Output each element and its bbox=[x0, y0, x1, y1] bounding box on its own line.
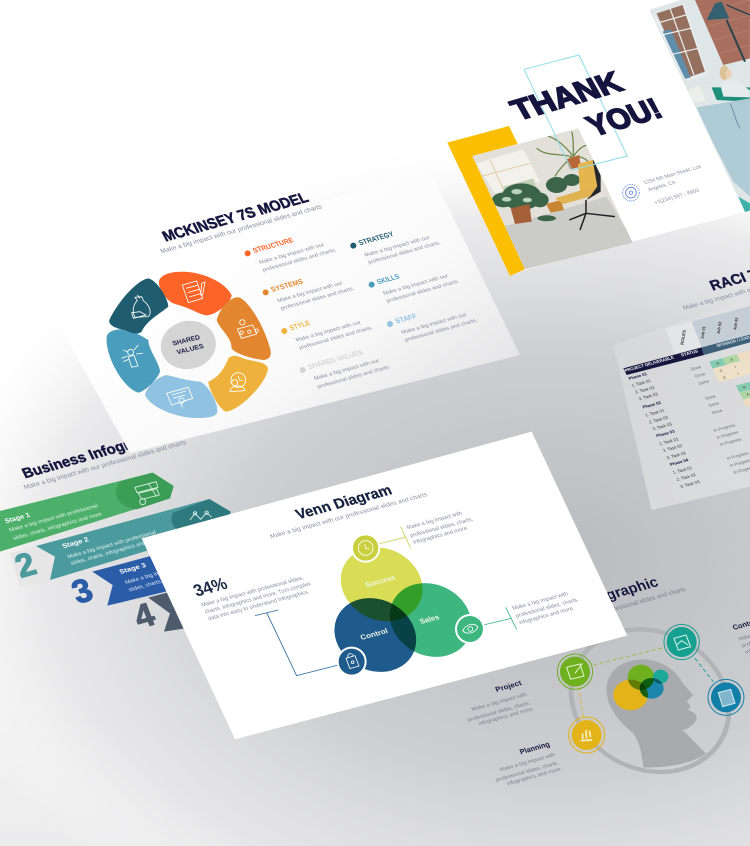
McKinsey subtitle: Make a big impact with our professional slides and charts bbox=[159, 204, 324, 255]
Venn circles bbox=[321, 539, 484, 681]
item: strategy bbox=[350, 229, 442, 266]
icon: idea person bbox=[122, 345, 143, 367]
circle labels bbox=[359, 573, 441, 642]
brain bubbles bbox=[613, 665, 668, 710]
RACI table: ROLES bbox=[679, 330, 687, 345]
stage 2 arrow: slides, charts, infographics and more bbox=[70, 537, 161, 567]
RACI table: R bbox=[715, 361, 720, 366]
item: style bbox=[281, 318, 374, 351]
item: structure bbox=[245, 236, 338, 273]
stage 3 number: 3 bbox=[67, 572, 98, 611]
item: structure: STRUCTURE bbox=[251, 236, 295, 255]
stage 4 arrow bbox=[148, 590, 197, 632]
head title: Infographic bbox=[578, 575, 661, 611]
item: strategy: Make a big impact with our bbox=[364, 235, 431, 258]
stage 3 arrow: slides, charts, infographics and more bbox=[128, 563, 219, 593]
icon: certificate screen bbox=[167, 387, 193, 407]
icon: money bag bbox=[132, 295, 150, 318]
RACI table: Done bbox=[708, 400, 720, 408]
photo: office with plants and chair bbox=[470, 127, 637, 273]
RACI table: Phase 01 bbox=[628, 371, 648, 381]
RACI table: In Progress bbox=[716, 430, 739, 440]
stage 1 arrow: Stage 1 bbox=[4, 512, 32, 525]
label: project: infographics and more. bbox=[478, 706, 535, 727]
RACI table: 2. Task 02 bbox=[634, 385, 656, 395]
panel: thank you slide bbox=[447, 0, 750, 276]
RACI table: 3. Task 03 bbox=[652, 421, 673, 431]
circle labels: Success bbox=[364, 573, 397, 589]
item: style: Make a big impact with our bbox=[295, 320, 362, 343]
RACI table: Done bbox=[711, 408, 724, 415]
RACI table: Phase 02 bbox=[642, 400, 662, 410]
item: systems: professional slides and charts. bbox=[280, 286, 356, 312]
RACI table: STATUS bbox=[680, 348, 699, 358]
Venn subtitle: Make a big impact with our professional slides and charts bbox=[269, 492, 429, 540]
stat: 34 percent: 34% bbox=[190, 573, 230, 600]
head silhouette bbox=[606, 659, 706, 767]
contact text: 1234 5th Main Street, Los bbox=[643, 164, 703, 186]
item: systems: SYSTEMS bbox=[269, 277, 305, 294]
item: style: professional slides and charts. bbox=[298, 325, 374, 351]
RACI table: 3. Task 03 bbox=[679, 479, 701, 489]
text: sales note: professional slides, charts, bbox=[515, 597, 580, 619]
panel: head infographic slide bbox=[467, 575, 750, 789]
thank you title: THANK bbox=[505, 66, 628, 127]
RACI table: In Progress bbox=[726, 451, 749, 461]
text: sales note bbox=[512, 591, 580, 626]
stage 4 number: 4 bbox=[129, 596, 160, 636]
icon: eye badge bbox=[455, 614, 485, 644]
RACI table: 1. Task 01 bbox=[672, 465, 694, 475]
text: success note: infographics and more. bbox=[412, 525, 470, 546]
head subtitle: Make a big impact with our professional slides and charts bbox=[530, 586, 687, 636]
RACI table: 1. Task 01 bbox=[631, 378, 652, 388]
RACI table: Done bbox=[690, 364, 703, 372]
icon: clock and person bbox=[230, 373, 246, 392]
stat description: data into easy to understand infographics. bbox=[207, 589, 311, 622]
text: success note bbox=[406, 511, 475, 546]
panel: McKinsey 7S slide bbox=[37, 170, 520, 453]
center circle: shared values: VALUES bbox=[176, 343, 205, 356]
stat description: Make a big impact with professional slides, bbox=[201, 575, 305, 608]
item: systems: Make a big impact with our bbox=[276, 281, 344, 304]
item: systems bbox=[263, 277, 356, 312]
icon: clock badge bbox=[351, 533, 380, 563]
stage 1 arrow: Make a big impact with professional bbox=[8, 503, 99, 533]
item: strategy: professional slides and charts. bbox=[367, 240, 442, 266]
RACI table: 2. Task 02 bbox=[648, 415, 670, 425]
connector lines bbox=[255, 527, 517, 676]
item: skills: professional slides and charts. bbox=[385, 279, 461, 304]
RACI table: 2. Task 02 bbox=[676, 472, 697, 482]
stage 1 arrow bbox=[0, 473, 174, 552]
RACI table: In Progress bbox=[719, 437, 742, 447]
McKinsey title: MCKINSEY 7S MODEL bbox=[160, 190, 311, 245]
stat description: charts, infographics and more. Turn complex bbox=[204, 581, 312, 615]
RACI table: 3. Task 03 bbox=[666, 450, 687, 460]
node: planning icon bbox=[569, 717, 605, 753]
icon: org chart bbox=[237, 320, 258, 338]
item: structure: Make a big impact with our bbox=[258, 242, 326, 266]
circle labels: Control bbox=[359, 626, 389, 642]
panel: RACI slide bbox=[613, 253, 750, 510]
label: project: professional slides, charts, bbox=[467, 700, 532, 723]
RACI table: Phase 04 bbox=[669, 457, 690, 467]
text: sales note: infographics and more. bbox=[518, 606, 576, 626]
contact text bbox=[643, 164, 703, 206]
item: staff: professional slides and charts. bbox=[404, 318, 479, 343]
item: structure: professional slides and charts. bbox=[261, 247, 338, 273]
item: shared values: professional slides and charts. bbox=[316, 364, 392, 390]
label: planning: Planning bbox=[518, 740, 551, 756]
item: skills bbox=[369, 272, 461, 304]
big ring bbox=[546, 613, 750, 789]
RACI table: PROJECT DELIVERABLE bbox=[624, 355, 675, 373]
RACI table: R bbox=[742, 384, 747, 390]
label: project bbox=[467, 678, 535, 727]
stage 2 number: 2 bbox=[10, 546, 41, 585]
RACI table: In Progress bbox=[713, 423, 736, 433]
icon: gear bbox=[623, 184, 639, 201]
item: strategy: STRATEGY bbox=[357, 229, 395, 247]
RACI table: 1. Task 01 bbox=[658, 436, 680, 446]
RACI table: C bbox=[719, 368, 724, 373]
yellow frame bbox=[447, 126, 525, 276]
label: project: Make a big impact with bbox=[471, 692, 528, 713]
stage 2 arrow: Stage 2 bbox=[61, 536, 90, 550]
stage 3 arrow bbox=[92, 550, 219, 606]
item: skills: SKILLS bbox=[375, 272, 401, 286]
RACI table: Done bbox=[698, 378, 710, 386]
RACI table: 2. Task 02 bbox=[662, 443, 684, 453]
contact text: Angeles, CA bbox=[647, 180, 678, 193]
item: staff: STAFF bbox=[393, 311, 419, 325]
node: project icon bbox=[557, 654, 593, 689]
label: planning bbox=[495, 740, 564, 787]
contact text: +1(234) 567 - 8900 bbox=[653, 188, 700, 206]
icon: clipboard and pen bbox=[182, 281, 205, 303]
item: skills: Make a big impact with our bbox=[382, 273, 450, 297]
stage 3 arrow: Make a big impact with professional bbox=[124, 556, 215, 586]
thank you title: YOU! bbox=[581, 93, 668, 143]
label: project: Project bbox=[494, 678, 524, 694]
item: staff bbox=[387, 311, 479, 343]
node: content icon bbox=[664, 624, 699, 660]
RACI table: 1. Task 01 bbox=[644, 408, 666, 418]
RACI table: I bbox=[733, 364, 737, 369]
stage 2 arrow: Make a big impact with professional bbox=[67, 530, 157, 560]
RACI table: 3. Task 03 bbox=[638, 391, 659, 401]
thank you title bbox=[505, 66, 668, 143]
text: success note: professional slides, charts, bbox=[409, 517, 475, 539]
item: shared values: Make a big impact with our bbox=[313, 358, 381, 382]
label: planning: Make a big impact with bbox=[499, 752, 557, 773]
Venn title: Venn Diagram bbox=[293, 483, 395, 523]
item: style: STYLE bbox=[288, 318, 312, 332]
RACI table: Done bbox=[694, 371, 707, 379]
panel: business infographic slide bbox=[0, 427, 231, 636]
center circle: shared values bbox=[156, 316, 220, 374]
RACI table: Phase 03 bbox=[655, 429, 676, 438]
RACI table: Done bbox=[704, 393, 717, 401]
RACI table: A bbox=[729, 357, 734, 362]
item: shared values: SHARED VALUES bbox=[306, 348, 365, 371]
circle labels: Sales bbox=[418, 612, 441, 626]
center circle: shared values: SHARED bbox=[172, 334, 201, 348]
photo: lounge with woman and sofa bbox=[647, 0, 750, 213]
label: planning: professional slides, charts, bbox=[495, 760, 560, 783]
RACI table: Job 03 bbox=[732, 316, 739, 330]
text: success note: Make a big impact with bbox=[406, 511, 464, 531]
RACI table: Job 01 bbox=[699, 325, 707, 339]
text: sales note: Make a big impact with bbox=[512, 591, 569, 612]
label: planning: infographics and more. bbox=[506, 766, 564, 787]
item: staff: Make a big impact with our bbox=[400, 312, 468, 336]
RACI table: I bbox=[737, 371, 740, 376]
stage 3 arrow: Stage 3 bbox=[118, 562, 148, 576]
stage 1 arrow: slides, charts, infographics and more bbox=[12, 512, 103, 542]
business subtitle: Make a big impact with our professional slides and charts bbox=[23, 439, 188, 491]
node: blue icon bbox=[708, 679, 744, 715]
business title: Business Infographic bbox=[20, 427, 170, 482]
RACI table: Job 02 bbox=[715, 320, 723, 334]
item: shared values bbox=[300, 348, 392, 390]
panel: Venn diagram slide bbox=[142, 432, 627, 739]
cyan outline rectangle bbox=[524, 55, 627, 170]
icon: lock badge bbox=[337, 647, 367, 677]
RACI table bbox=[623, 306, 750, 489]
dashed connectors bbox=[578, 647, 713, 720]
stage 2 arrow bbox=[36, 499, 231, 580]
wheel diagram bbox=[107, 272, 271, 418]
label: content bbox=[731, 616, 750, 656]
RACI table: C bbox=[722, 375, 727, 380]
